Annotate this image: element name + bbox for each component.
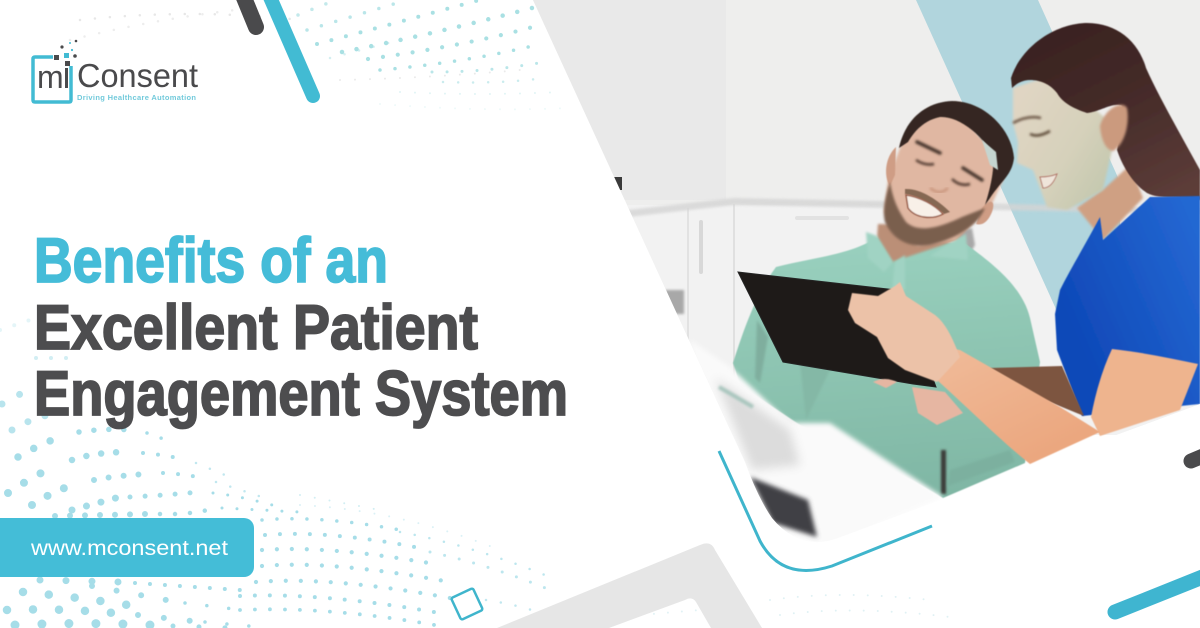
halftone dots: left and bottom wave [0, 320, 550, 628]
photo wall background [530, 0, 1200, 435]
title [34, 226, 568, 429]
patient moustache [905, 189, 950, 214]
patient smile [906, 195, 943, 217]
bottom grey rounded frame [497, 543, 762, 628]
chair headrest [959, 227, 976, 250]
upper arm [1091, 349, 1198, 436]
curved teal outline under photo [719, 451, 932, 570]
halftone dots: faint lower right [640, 595, 950, 617]
logo i [65, 68, 68, 88]
title line 3: Engagement System [34, 359, 568, 429]
patient beard [884, 182, 985, 246]
right grey bar [1191, 451, 1200, 461]
logo pixels [54, 40, 77, 66]
small teal square outline [451, 588, 483, 620]
patient fingers [873, 379, 963, 425]
chair grey haze [715, 378, 800, 470]
clinician scrubs [1055, 196, 1200, 416]
logo tagline: Driving Healthcare Automation [77, 93, 196, 102]
clinician smile [1040, 174, 1057, 188]
title line 1: Benefits of an [34, 226, 388, 296]
far forearm [990, 366, 1084, 416]
clinician hair [1011, 23, 1200, 200]
website pill [0, 518, 254, 577]
clinician eye and brow [1013, 117, 1050, 135]
photo: dentist showing tablet to patient [530, 0, 1200, 548]
logo tablet frame [33, 57, 71, 102]
patient hair [899, 101, 1014, 205]
patient eyes and brows [916, 142, 982, 185]
patient collar and placket [866, 232, 968, 290]
chair arm detail [719, 387, 753, 407]
right teal bar [1115, 572, 1200, 612]
decorative top teal bar [266, 0, 313, 96]
patient ears [886, 147, 993, 224]
title line 2: Excellent Patient [34, 293, 478, 363]
counter edge [630, 198, 1139, 217]
logo wordmark: Consent [77, 57, 198, 94]
website url: www.mconsent.net [30, 537, 228, 560]
decorative top grey bar [240, 0, 256, 27]
tablet [738, 272, 936, 387]
teal light patch on patient forehead [982, 140, 998, 170]
chair shadow [750, 477, 817, 537]
logo [33, 40, 198, 102]
halftone dots: top right of logo [70, 0, 570, 109]
logo m: m [37, 59, 64, 95]
blurred dental chair [704, 366, 944, 498]
patient nose shadow [930, 188, 948, 192]
patient neck [877, 224, 968, 262]
patient shirt [733, 238, 1040, 498]
clinician ear [1100, 105, 1128, 151]
clinician face [1013, 78, 1112, 210]
clinician neck [1077, 165, 1143, 240]
patient face [884, 110, 1004, 246]
forearm [930, 345, 1100, 464]
patient shirt shading [755, 320, 1015, 494]
hand holding tablet [848, 282, 960, 382]
translucent teal band [916, 0, 1120, 340]
